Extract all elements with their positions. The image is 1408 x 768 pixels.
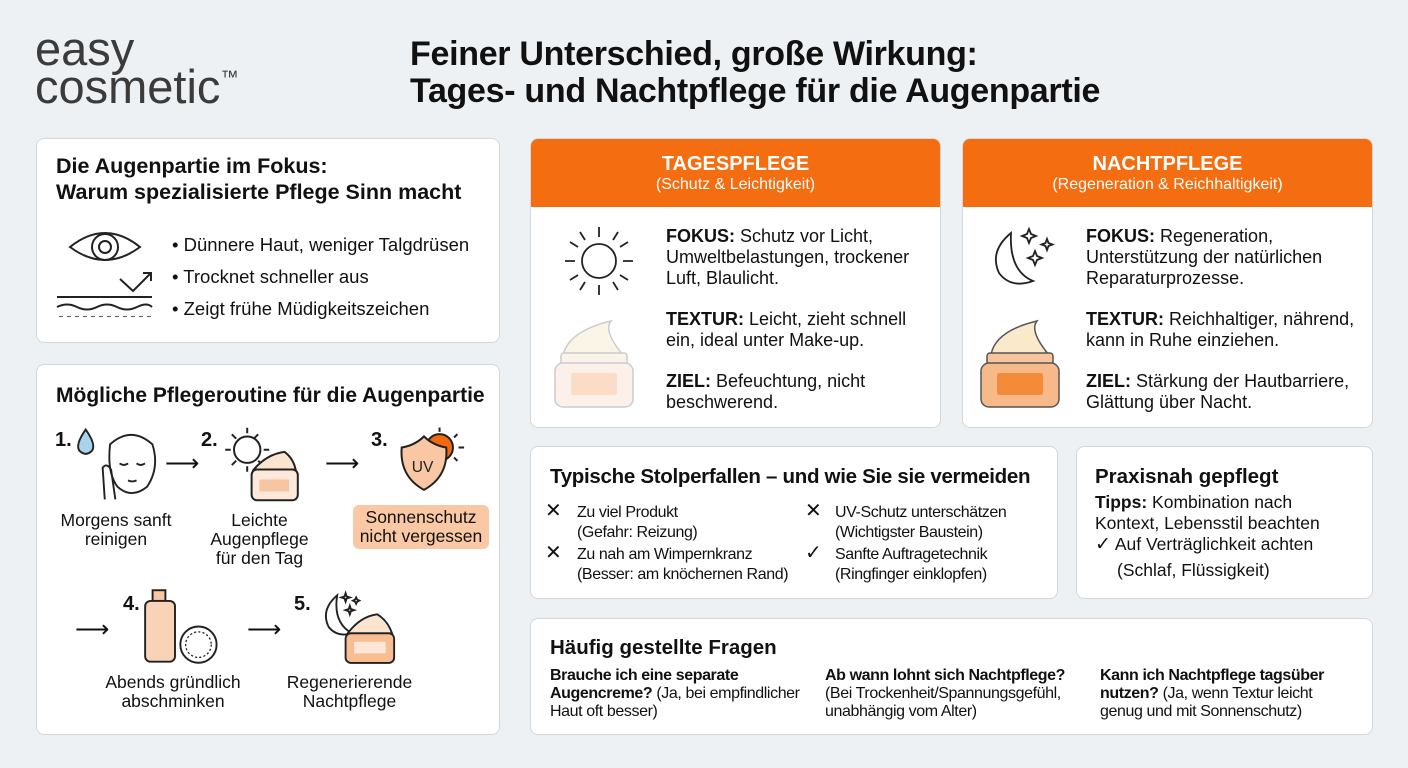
panel: stolperfallen: (Ringfinger einklopfen) bbox=[835, 566, 987, 583]
step 4: 4. bbox=[123, 593, 140, 615]
header: NACHTPFLEGE bbox=[1092, 153, 1242, 175]
item: zu viel produkt bbox=[545, 500, 697, 541]
step 3: UV bbox=[412, 459, 434, 476]
faq 2: Ab wann lohnt sich Nachtpflege? (Bei Trockenheit/Spannungsgefühl, unabhängig vom Alter) bbox=[825, 667, 1065, 720]
callout: Sonnenschutz bbox=[366, 507, 476, 527]
item: uv-schutz: ✕ bbox=[805, 500, 821, 522]
text: (Schlaf, Flüssigkeit) bbox=[1117, 560, 1270, 580]
faq 1: Brauche ich eine separate Augencreme? (Ja, bei empfindlicher Haut oft besser) bbox=[550, 667, 800, 720]
step 2: Augenpflege bbox=[210, 529, 309, 549]
bullet list: • Trocknet schneller aus bbox=[172, 266, 369, 287]
text: FOKUS: Schutz vor Licht, Umweltbelastungen, trockener Luft, Blaulicht. TEXTUR: Leicht, zieht schnell ein, ideal unter Make-up. ZIEL: Befeuchtung, nicht beschwerend. bbox=[666, 226, 909, 412]
heading: Die Augenpartie im Fokus: bbox=[56, 154, 328, 178]
icon: day cream jar bbox=[554, 320, 634, 408]
text: ✓ Auf Verträglichkeit achten bbox=[1095, 534, 1313, 555]
header bbox=[531, 139, 940, 207]
item: auftragetechnik: ✓ bbox=[805, 542, 821, 564]
step 4: abschminken bbox=[121, 691, 225, 711]
callout: nicht vergessen bbox=[360, 526, 482, 546]
logo: easy bbox=[35, 22, 134, 75]
heading: Warum spezialisierte Pflege Sinn macht bbox=[56, 180, 461, 204]
arrow: ⟶ bbox=[325, 450, 359, 477]
step 3 bbox=[353, 428, 489, 549]
step 1 bbox=[55, 428, 172, 549]
panel: augenpartie im fokus bbox=[36, 138, 500, 343]
bullet list: • Dünnere Haut, weniger Talgdrüsen bbox=[172, 234, 469, 255]
step 2: Leichte bbox=[231, 510, 288, 530]
header: (Regeneration & Reichhaltigkeit) bbox=[1052, 176, 1283, 193]
header bbox=[963, 139, 1372, 207]
item: wimpernkranz bbox=[545, 542, 788, 583]
logo bbox=[35, 22, 238, 113]
panel: stolperfallen: Zu viel Produkt bbox=[577, 504, 678, 521]
panel: stolperfallen: Zu nah am Wimpernkranz bbox=[577, 546, 752, 563]
arrow: ⟶ bbox=[75, 616, 109, 643]
item: zu viel produkt: ✕ bbox=[545, 500, 561, 522]
step 5 bbox=[287, 590, 412, 711]
panel: stolperfallen: Sanfte Auftragetechnik bbox=[835, 546, 987, 563]
heading: Mögliche Pflegeroutine für die Augenpartie bbox=[56, 384, 485, 407]
callout bbox=[353, 505, 489, 549]
heading: Typische Stolperfallen – und wie Sie sie vermeiden bbox=[550, 465, 1030, 488]
panel: stolperfallen: UV-Schutz unterschätzen bbox=[835, 504, 1006, 521]
icon: night cream jar bbox=[980, 320, 1060, 408]
title bbox=[410, 35, 1100, 110]
step 5: Regenerierende bbox=[287, 672, 412, 692]
panel: praxisnah bbox=[1076, 446, 1373, 599]
step 2: 2. bbox=[201, 429, 218, 451]
item: uv-schutz bbox=[805, 500, 1006, 541]
icon: moon bbox=[994, 226, 1055, 285]
panel: pflegeroutine bbox=[36, 364, 500, 735]
title: Tages- und Nachtpflege für die Augenpartie bbox=[410, 72, 1100, 110]
heading: Häufig gestellte Fragen bbox=[550, 636, 777, 659]
step 1: reinigen bbox=[85, 529, 147, 549]
icon: eye and skin bbox=[56, 232, 153, 317]
bullet list: • Zeigt frühe Müdigkeitszeichen bbox=[172, 298, 429, 319]
text bbox=[1095, 492, 1320, 580]
item: auftragetechnik bbox=[805, 542, 988, 583]
icon: sun bbox=[565, 227, 633, 295]
header: TAGESPFLEGE bbox=[662, 153, 809, 175]
header: (Schutz & Leichtigkeit) bbox=[656, 176, 815, 193]
step 5: 5. bbox=[294, 593, 311, 615]
step 5: Nachtpflege bbox=[303, 691, 396, 711]
logo: cosmetic™ bbox=[35, 60, 238, 113]
step 1: Morgens sanft bbox=[61, 510, 171, 530]
panel: stolperfallen bbox=[530, 446, 1058, 599]
step 2 bbox=[201, 428, 309, 568]
faq 3: Kann ich Nachtpflege tagsüber nutzen? (Ja, wenn Textur leicht genug und mit Sonnenschutz) bbox=[1100, 667, 1324, 720]
panel: stolperfallen: (Besser: am knöchernen Rand) bbox=[577, 566, 788, 583]
heading bbox=[56, 154, 462, 204]
item: wimpernkranz: ✕ bbox=[545, 542, 561, 564]
text: FOKUS: Regeneration, Unterstützung der natürlichen Reparaturprozesse. TEXTUR: Reichhaltiger, nährend, kann in Ruhe einziehen. ZIEL: Stärkung der Hautbarriere, Glättung über Nacht. bbox=[1086, 226, 1354, 412]
heading: Praxisnah gepflegt bbox=[1095, 465, 1278, 488]
title: Feiner Unterschied, große Wirkung: bbox=[410, 35, 978, 73]
panel: nachtpflege bbox=[962, 138, 1373, 428]
arrow: ⟶ bbox=[165, 450, 199, 477]
bullet list bbox=[172, 234, 469, 319]
arrow: ⟶ bbox=[247, 616, 281, 643]
step 3: 3. bbox=[371, 429, 388, 451]
step 1: 1. bbox=[55, 429, 72, 451]
step 4: Abends gründlich bbox=[105, 672, 241, 692]
step 4 bbox=[105, 589, 241, 711]
panel: tagespflege bbox=[530, 138, 941, 428]
panel: faq bbox=[530, 618, 1373, 735]
panel: stolperfallen: (Wichtigster Baustein) bbox=[835, 524, 983, 541]
step 2: für den Tag bbox=[216, 548, 303, 568]
panel: stolperfallen: (Gefahr: Reizung) bbox=[577, 524, 697, 541]
text: Tipps: Kombination nach Kontext, Lebensstil beachten bbox=[1095, 492, 1320, 533]
